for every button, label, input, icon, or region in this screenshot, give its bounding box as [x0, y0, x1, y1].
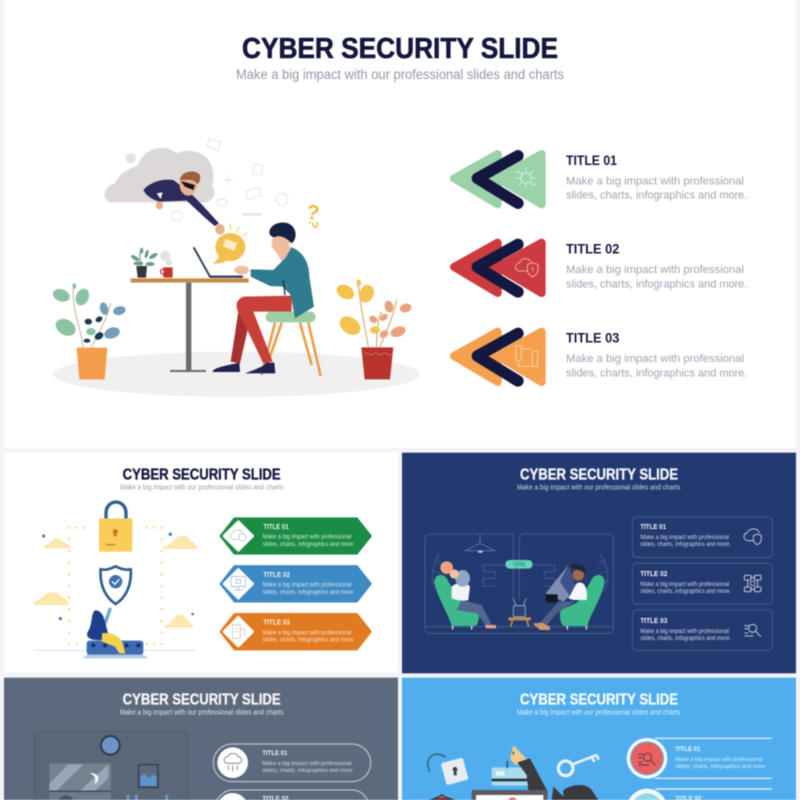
item 1	[454, 152, 747, 204]
arrow card 3	[221, 614, 370, 649]
question marks: ?	[305, 218, 322, 231]
box 2	[632, 563, 772, 604]
cloud	[105, 148, 215, 202]
man	[213, 222, 314, 373]
pill 1: Make a big impact with professional	[262, 761, 351, 767]
heading: CYBER SECURITY SLIDE	[520, 466, 678, 483]
box 2: TITLE 02	[640, 571, 667, 578]
ground shadow	[53, 352, 420, 397]
illustration: hacker phishing a man at a desk	[51, 138, 420, 397]
illustration: VPN living room	[425, 534, 613, 633]
right person in armchair	[533, 564, 605, 630]
box 1: slides, charts, infographics and more.	[640, 542, 731, 548]
list item 1: TITLE 01	[675, 746, 701, 753]
title: CYBER SECURITY SLIDE	[242, 33, 558, 65]
item 3: Make a big impact with professional	[566, 353, 744, 365]
desk	[131, 278, 249, 372]
arrow card 3: slides, charts, infographics and more	[263, 638, 354, 644]
heading: CYBER SECURITY SLIDE	[123, 466, 281, 483]
hacker	[143, 171, 225, 235]
icon: padlock	[99, 502, 132, 552]
item 1: Make a big impact with professional	[566, 175, 744, 187]
arrow card 3: TITLE 03	[263, 620, 290, 627]
router on table	[508, 598, 531, 627]
person on platform	[83, 609, 148, 658]
item 1: slides, charts, infographics and more.	[566, 190, 747, 202]
VPN pill: VPN	[513, 562, 525, 568]
item 3: TITLE 03	[566, 330, 620, 346]
item 3: slides, charts, infographics and more.	[566, 367, 747, 379]
item 2: Make a big impact with professional	[566, 264, 744, 276]
box 2: Make a big impact with professional	[640, 582, 729, 588]
box 1: TITLE 01	[640, 524, 666, 531]
box 3: Make a big impact with professional	[640, 629, 729, 635]
box 1: Make a big impact with professional	[640, 535, 729, 541]
item 2	[454, 241, 747, 293]
window	[49, 763, 111, 791]
pill 2	[217, 790, 367, 800]
list item 1: slides, charts, infographics and more	[675, 764, 765, 770]
illustration: padlock and shield	[33, 502, 197, 658]
lamp	[465, 534, 495, 553]
subheading: Make a big impact with our professional slides and charts	[120, 708, 284, 717]
key	[558, 755, 599, 776]
picture frame	[139, 765, 158, 787]
right plant	[334, 279, 413, 379]
list item 1: Make a big impact with professional	[675, 757, 763, 763]
laptop	[194, 248, 242, 277]
heading: CYBER SECURITY SLIDE	[520, 691, 678, 708]
icon: shield	[101, 566, 131, 604]
arrow card 2: slides, charts, infographics and more	[263, 590, 354, 596]
left plant	[51, 283, 127, 379]
stool	[262, 312, 321, 376]
subheading: Make a big impact with our professional slides and charts	[120, 483, 284, 492]
pill 1: TITLE 01	[262, 750, 288, 757]
item 2: TITLE 02	[566, 241, 620, 257]
arrow card 2	[221, 566, 370, 601]
panel: white thumbnail slide	[4, 453, 398, 673]
pill 1: slides, charts, infographics and more	[262, 768, 353, 774]
panel: grey thumbnail slide	[4, 678, 398, 800]
subheading: Make a big impact with our professional slides and charts	[517, 483, 681, 492]
shield	[428, 794, 456, 800]
question marks: ?	[305, 201, 321, 225]
item 1: TITLE 01	[566, 152, 617, 168]
item 3	[454, 330, 747, 382]
icon: orange arrow triangles	[454, 332, 542, 382]
panel: navy thumbnail slide	[402, 453, 796, 673]
icon: red arrow triangles	[454, 243, 542, 293]
arrow card 3: Make a big impact with professional	[263, 630, 351, 636]
desk plant	[130, 248, 158, 278]
arrow card 2: TITLE 02	[263, 572, 290, 579]
heading: CYBER SECURITY SLIDE	[123, 691, 281, 708]
subtitle: Make a big impact with our professional slides and charts	[236, 67, 564, 82]
panel: hero slide	[4, 0, 796, 448]
item 2: slides, charts, infographics and more.	[566, 278, 747, 290]
subheading: Make a big impact with our professional slides and charts	[517, 708, 681, 717]
box 3	[632, 610, 772, 651]
illustration: room with window	[34, 732, 188, 800]
box 3: slides, charts, infographics and more.	[640, 636, 731, 642]
illustration: lock, key and hacker	[428, 745, 599, 800]
arrow card 1: slides, charts, infographics and more	[263, 542, 354, 548]
wall clock	[101, 736, 120, 755]
coffee mug	[160, 251, 173, 278]
left person in armchair	[434, 561, 496, 629]
list: three titled items	[454, 152, 747, 382]
box 3: TITLE 03	[640, 618, 667, 625]
pill 1	[213, 744, 371, 782]
box 2: slides, charts, infographics and more.	[640, 589, 731, 595]
box 1	[632, 517, 772, 557]
list item 1	[627, 738, 772, 779]
speech bubble with envelope	[213, 224, 247, 264]
VPN pill	[505, 560, 533, 569]
faint floating icons	[126, 138, 288, 221]
arrow card 1: TITLE 01	[263, 524, 289, 531]
icon: green arrow triangles	[454, 154, 542, 204]
hacker and laptop	[472, 785, 598, 800]
list item 2	[627, 789, 772, 800]
panel: blue thumbnail slide	[402, 678, 796, 800]
open padlock	[428, 754, 469, 785]
arrow card 1	[221, 519, 370, 553]
credit card and hand	[492, 745, 547, 790]
arrow card 1: Make a big impact with professional	[263, 535, 351, 541]
arrow card 2: Make a big impact with professional	[263, 582, 351, 588]
